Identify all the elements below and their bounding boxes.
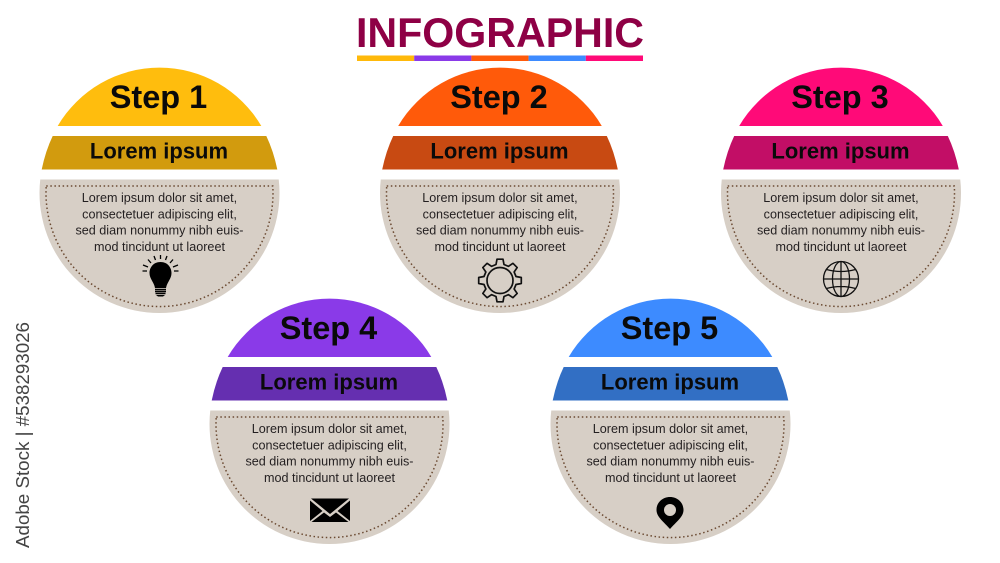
step 4 text: mod tincidunt ut laoreet	[264, 471, 395, 485]
step 2 heading: Step 2	[450, 79, 548, 115]
step 1 text: consectetuer adipiscing elit,	[82, 207, 237, 221]
step 1 subheading: Lorem ipsum	[90, 138, 228, 164]
step 3 cap	[739, 68, 943, 126]
panel: step 4	[210, 299, 450, 544]
step 5 body panel	[550, 410, 790, 544]
step 3 text: Lorem ipsum dolor sit amet,	[763, 191, 919, 205]
watermark credit: Adobe Stock | #538293026	[12, 322, 33, 548]
step 5 text: Lorem ipsum dolor sit amet,	[593, 422, 748, 436]
step 3 band	[723, 136, 959, 170]
step 1 heading: Step 1	[110, 79, 207, 115]
step 2 cap	[398, 68, 602, 126]
icon: gear	[479, 259, 521, 302]
step 1 cap	[58, 68, 261, 126]
step 4 band	[212, 367, 447, 400]
title: INFOGRAPHIC	[356, 9, 644, 56]
step 3 text: sed diam nonummy nibh euis-	[757, 224, 925, 238]
step 1 body panel	[40, 180, 280, 313]
panel: step 2	[380, 68, 620, 313]
step 2 band	[382, 136, 618, 170]
step 5 text: sed diam nonummy nibh euis-	[586, 455, 754, 469]
step 4 body panel	[210, 410, 450, 544]
icon: map pin	[656, 497, 684, 529]
step 3 subheading: Lorem ipsum	[771, 138, 910, 164]
panel: step 5	[550, 299, 790, 544]
title colour underline	[357, 56, 643, 61]
step 2 text: sed diam nonummy nibh euis-	[416, 224, 584, 238]
step 1 band	[42, 136, 277, 170]
step 4 heading: Step 4	[280, 310, 377, 346]
step 3 heading: Step 3	[791, 79, 889, 115]
step 4 subheading: Lorem ipsum	[260, 370, 398, 394]
icon: envelope	[310, 498, 350, 522]
icon: light bulb	[142, 255, 178, 296]
step 3 text: consectetuer adipiscing elit,	[764, 207, 918, 221]
step 1 text: mod tincidunt ut laoreet	[94, 240, 225, 254]
step 4 cap	[228, 299, 431, 357]
panel: step 1	[40, 68, 280, 313]
step 1 text: Lorem ipsum dolor sit amet,	[82, 191, 237, 205]
step 3 text: mod tincidunt ut laoreet	[776, 240, 907, 254]
step 2 text: mod tincidunt ut laoreet	[435, 240, 566, 254]
step 5 heading: Step 5	[621, 310, 718, 346]
step 5 band	[553, 367, 788, 400]
step 5 text: consectetuer adipiscing elit,	[593, 438, 748, 452]
icon: globe	[824, 262, 858, 296]
step 2 body panel	[380, 180, 620, 313]
step 2 text: consectetuer adipiscing elit,	[423, 207, 577, 221]
step 1 text: sed diam nonummy nibh euis-	[76, 224, 244, 238]
step 4 text: consectetuer adipiscing elit,	[252, 438, 407, 452]
step 5 text: mod tincidunt ut laoreet	[605, 471, 736, 485]
step 5 cap	[569, 299, 772, 357]
step 4 text: sed diam nonummy nibh euis-	[246, 455, 414, 469]
step 2 subheading: Lorem ipsum	[430, 138, 569, 164]
panel: step 3	[721, 68, 961, 313]
step 4 text: Lorem ipsum dolor sit amet,	[252, 422, 407, 436]
step 3 body panel	[721, 180, 961, 313]
step 5 subheading: Lorem ipsum	[601, 370, 739, 394]
step 2 text: Lorem ipsum dolor sit amet,	[422, 191, 578, 205]
